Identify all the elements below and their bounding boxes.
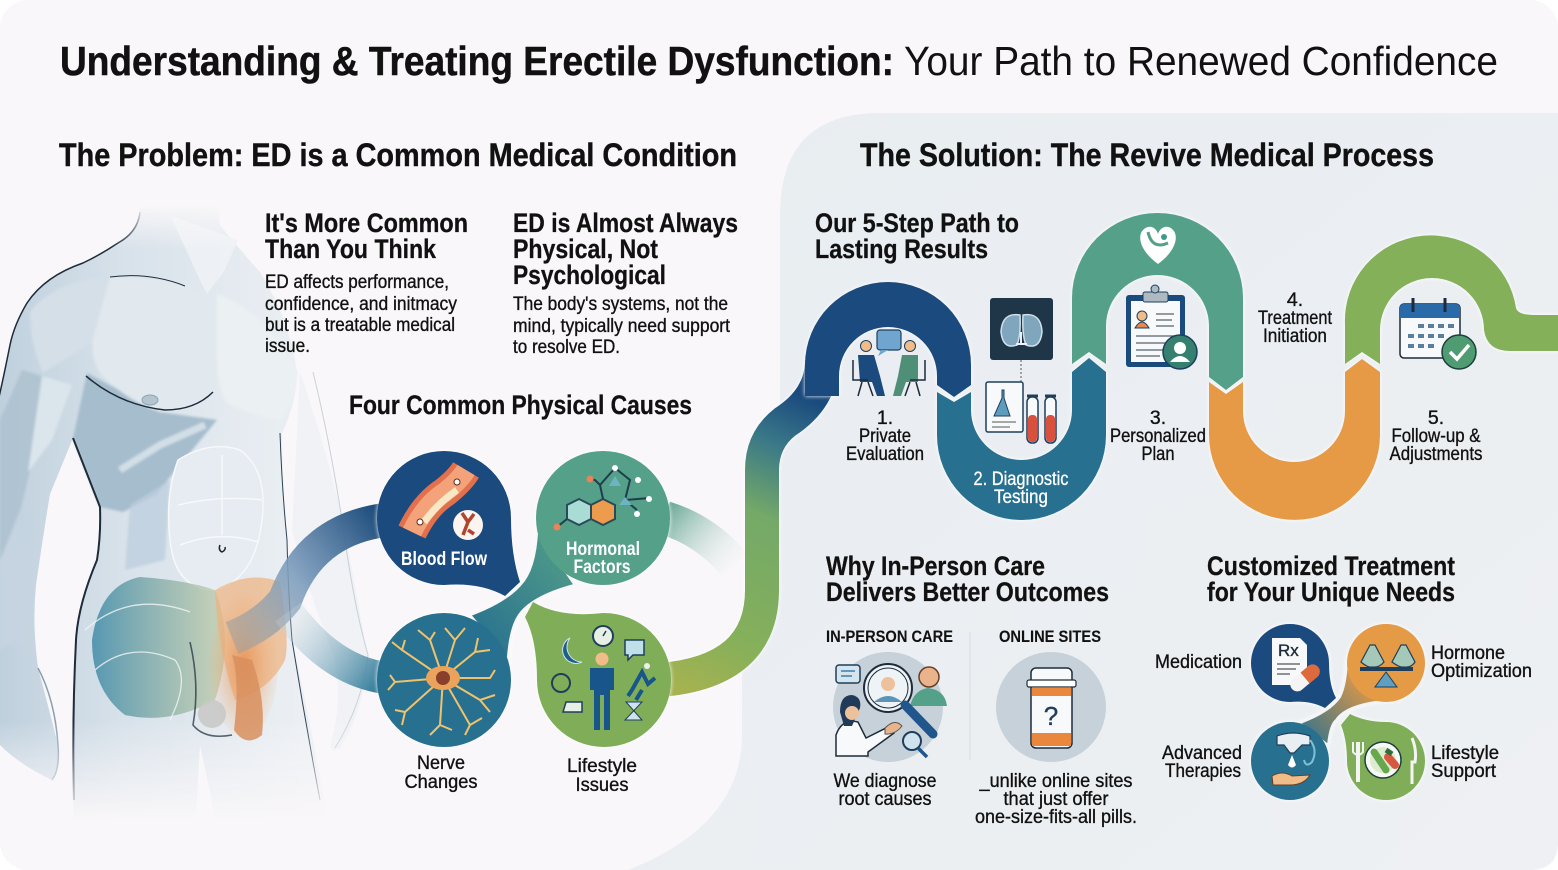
panel: treatment options cluster	[1251, 624, 1425, 800]
heading: why in-person care: Delivers Better Outcomes	[826, 577, 1109, 607]
icon: pill bottle	[996, 652, 1106, 762]
label: step 4: 4.	[1287, 289, 1303, 311]
cause: blood flow: Blood Flow	[401, 549, 487, 570]
label: advanced therapies: Therapies	[1165, 761, 1241, 782]
label: nerve changes: Nerve	[417, 752, 465, 774]
label: step 1: Private	[859, 425, 911, 447]
text block: almost always physical: Physical, Not	[513, 234, 658, 264]
abdomen	[169, 447, 263, 590]
caption: we diagnose	[834, 770, 936, 810]
step 1 segment: navy	[805, 282, 971, 397]
step 4 segment: orange	[1209, 359, 1380, 520]
label: lifestyle issues: Issues	[576, 774, 629, 796]
icon: in-person diagnosis	[833, 652, 947, 762]
cause: hormonal factors and nerve changes	[377, 451, 670, 747]
chart: five step winding path	[805, 213, 1558, 520]
text block: more common: confidence, and initmacy	[265, 294, 457, 315]
title: Understanding & Treating Erectile Dysfunction:	[60, 38, 894, 84]
heading: customized treatment	[1207, 551, 1455, 607]
caption: we diagnose: root causes	[838, 788, 932, 810]
option: medication	[1251, 624, 1336, 708]
cause: hormonal factors and nerve changes: Hormonal	[566, 539, 640, 560]
connector ribbons from body to causes	[232, 518, 735, 678]
heading: online sites: ONLINE SITES	[999, 627, 1101, 646]
icon: step 2 scan and lab	[986, 298, 1056, 443]
illustration: pelvic highlight regions	[85, 577, 287, 740]
icon: step 3 clipboard	[1126, 285, 1197, 369]
divider	[969, 632, 971, 760]
icon: vessel inset	[453, 510, 483, 540]
label: step 4: Initiation	[1263, 325, 1327, 347]
label: step 2	[974, 469, 1068, 508]
cause: lifestyle issues	[525, 602, 671, 747]
label: medication: Medication	[1155, 651, 1242, 673]
cause: blood flow	[377, 451, 520, 596]
text block: more common	[265, 208, 468, 357]
text block: almost always physical	[513, 208, 738, 358]
icon: step 5 calendar	[1400, 298, 1476, 369]
icon: pill bottle: ?	[1044, 701, 1058, 731]
label: lifestyle issues: Lifestyle	[567, 755, 637, 777]
option: hormone optimization and advanced therapies	[1251, 624, 1425, 800]
text block: more common: issue.	[265, 336, 310, 357]
text block: almost always physical: The body's systems, not the	[513, 294, 728, 315]
label: hormone optimization	[1431, 643, 1532, 682]
label: lifestyle support	[1431, 743, 1499, 782]
label: step 3	[1110, 407, 1206, 465]
heading: the problem: The Problem: ED is a Common Medical Condition	[59, 137, 737, 173]
label: nerve changes: Changes	[404, 771, 478, 793]
text block: more common: Than You Think	[265, 234, 437, 264]
option: lifestyle support	[1341, 714, 1425, 800]
caption: unlike online sites: _unlike online sites	[979, 770, 1133, 792]
panel: solution background	[628, 113, 1558, 870]
label: lifestyle support: Lifestyle	[1431, 743, 1499, 764]
text block: more common: but is a treatable medical	[265, 315, 455, 336]
label: step 2: 2. Diagnostic	[974, 469, 1068, 490]
option: medication: Rx	[1278, 641, 1299, 660]
label: step 2: Testing	[994, 487, 1048, 508]
label: lifestyle issues	[567, 755, 637, 796]
body outlines	[0, 212, 140, 410]
heading: customized treatment: for Your Unique Needs	[1207, 577, 1455, 607]
main ribbon: causes to steps	[660, 360, 822, 680]
heading: why in-person care	[826, 551, 1109, 607]
heading: four causes: Four Common Physical Causes	[349, 390, 692, 420]
icon: neuron	[388, 628, 495, 735]
text block: almost always physical: Psychological	[513, 260, 666, 290]
text block: almost always physical: mind, typically need support	[513, 316, 731, 337]
heading: in-person care: IN-PERSON CARE	[826, 627, 953, 646]
label: lifestyle support: Support	[1431, 761, 1497, 782]
label: hormone optimization: Hormone	[1431, 643, 1505, 664]
heading: the solution: The Solution: The Revive Medical Process	[860, 137, 1434, 173]
caption: unlike online sites	[975, 770, 1137, 828]
caption: we diagnose: We diagnose	[834, 770, 936, 792]
text block: almost always physical: ED is Almost Always	[513, 208, 738, 238]
illustration: human body figure	[0, 205, 368, 830]
label: step 3: Personalized	[1110, 425, 1206, 447]
heading: why in-person care: Why In-Person Care	[826, 551, 1045, 581]
label: nerve changes	[404, 752, 478, 793]
step 3 segment: green teal	[1072, 213, 1243, 390]
label: advanced therapies	[1162, 743, 1242, 782]
label: step 4: Treatment	[1258, 307, 1332, 329]
arm shading	[0, 370, 71, 554]
label: step 1	[846, 407, 924, 465]
panel: physical causes cluster	[377, 451, 671, 747]
title	[60, 38, 1498, 84]
text block: more common: It's More Common	[265, 208, 468, 238]
label: hormone optimization: Optimization	[1431, 661, 1532, 682]
icon: molecule	[554, 465, 652, 530]
label: step 5: Adjustments	[1390, 443, 1483, 465]
icon: heart logo	[1140, 227, 1176, 264]
label: step 5	[1390, 407, 1483, 465]
shoulder and chest muscles	[30, 278, 224, 570]
label: step 5: 5.	[1428, 407, 1444, 429]
label: step 5: Follow-up &	[1392, 425, 1480, 447]
label: step 1: 1.	[877, 407, 893, 429]
label: step 3: 3.	[1150, 407, 1166, 429]
caption: unlike online sites: one-size-fits-all pills.	[975, 806, 1137, 828]
step 5 segment: green	[1345, 235, 1558, 364]
icon: step 1 conversation	[853, 330, 925, 396]
label: step 1: Evaluation	[846, 443, 924, 465]
step 2 segment: teal	[937, 358, 1106, 520]
label: advanced therapies: Advanced	[1162, 743, 1242, 764]
title: Your Path to Renewed Confidence	[904, 38, 1498, 84]
text block: almost always physical: to resolve ED.	[513, 337, 620, 358]
cause: hormonal factors and nerve changes: Factors	[574, 557, 630, 578]
heading: customized treatment: Customized Treatment	[1207, 551, 1455, 581]
label: step 3: Plan	[1142, 443, 1174, 465]
caption: unlike online sites: that just offer	[1004, 788, 1109, 810]
heading: five step path	[815, 208, 1019, 264]
heading: five step path: Lasting Results	[815, 234, 988, 264]
text block: more common: ED affects performance,	[265, 272, 449, 293]
label: step 4	[1258, 289, 1332, 347]
heading: five step path: Our 5-Step Path to	[815, 208, 1019, 238]
